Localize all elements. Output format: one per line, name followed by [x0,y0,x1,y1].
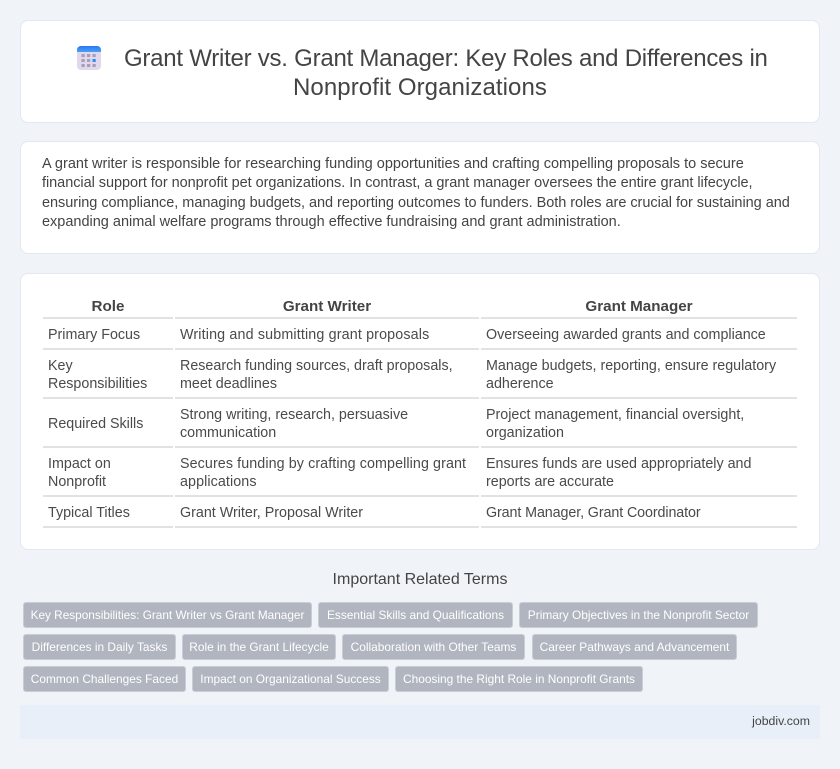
intro text: ensuring compliance, managing budgets, and reporting outcomes to funders. Both roles are crucial for sustaining and [42,195,790,211]
row: primary focus [48,327,766,343]
table header [92,298,693,315]
row: impact on nonprofit: reports are accurate [486,474,614,490]
tag [192,666,389,692]
row: key responsibilities: Research funding sources, draft proposals, [180,358,453,374]
row: key responsibilities: Key [48,358,73,374]
row: primary focus: Overseeing awarded grants and compliance [486,327,766,343]
title: Grant Writer vs. Grant Manager: Key Roles and Differences in [124,45,768,72]
footer bar [20,705,820,739]
title: Nonprofit Organizations [293,74,547,101]
row: required skills: organization [486,425,564,441]
intro text [42,156,790,230]
tag [519,602,758,628]
intro text: A grant writer is responsible for researching funding opportunities and crafting compelling proposals to secure [42,156,744,172]
row: required skills: communication [180,425,276,441]
intro text: financial support for nonprofit pet organizations. In contrast, a grant manager oversees the entire grant lifecycle, [42,175,753,191]
panel: comparison table [20,273,820,550]
tag [23,666,186,692]
row: impact on nonprofit: Nonprofit [48,474,106,490]
tag: Choosing the Right Role in Nonprofit Grants [403,672,635,686]
row: key responsibilities: Responsibilities [48,376,147,392]
row: key responsibilities: Manage budgets, reporting, ensure regulatory [486,358,776,374]
title [124,45,768,101]
row: typical titles: Grant Writer, Proposal Writer [180,505,363,521]
table header: Grant Writer [283,298,371,315]
row: required skills: Strong writing, research, persuasive [180,407,408,423]
table header: Grant Manager [585,298,693,315]
tag [342,634,525,660]
panel: introduction [20,141,820,254]
row: impact on nonprofit: Ensures funds are used appropriately and [486,456,751,472]
tag [182,634,336,660]
tag [23,634,176,660]
tag: Role in the Grant Lifecycle [189,640,329,654]
row: typical titles: Grant Manager, Grant Coordinator [486,505,701,521]
tag: Impact on Organizational Success [200,672,381,686]
row: primary focus: Writing and submitting grant proposals [180,327,429,343]
row: key responsibilities: adherence [486,376,554,392]
table header: Role [92,298,124,315]
row: required skills: Required Skills [48,416,143,432]
row: impact on nonprofit: applications [180,474,257,490]
tag: Essential Skills and Qualifications [327,608,504,622]
tag: Collaboration with Other Teams [351,640,516,654]
tag [395,666,643,692]
panel: title card [20,20,820,123]
icon: calendar [77,46,101,70]
tag: Key Responsibilities: Grant Writer vs Grant Manager [31,608,304,622]
row: required skills: Project management, financial oversight, [486,407,744,423]
tag [23,602,312,628]
row: primary focus: Primary Focus [48,327,140,343]
row: impact on nonprofit: Impact on [48,456,111,472]
comparison table [43,298,797,528]
related term tags [23,602,758,692]
row: impact on nonprofit: Secures funding by crafting compelling grant [180,456,466,472]
footer source: jobdiv.com [752,714,810,728]
tag: Common Challenges Faced [31,672,178,686]
tag [532,634,737,660]
intro text: expanding animal welfare programs through effective fundraising and grant administration. [42,214,621,230]
row: required skills [48,407,744,441]
row: key responsibilities [48,358,776,392]
related terms heading: Important Related Terms [333,571,507,588]
tag [318,602,513,628]
tag: Career Pathways and Advancement [540,640,729,654]
row: impact on nonprofit [48,456,751,490]
tag: Primary Objectives in the Nonprofit Sector [528,608,749,622]
row: key responsibilities: meet deadlines [180,376,277,392]
row: typical titles: Typical Titles [48,505,130,521]
row: typical titles [48,505,701,521]
tag: Differences in Daily Tasks [32,640,167,654]
